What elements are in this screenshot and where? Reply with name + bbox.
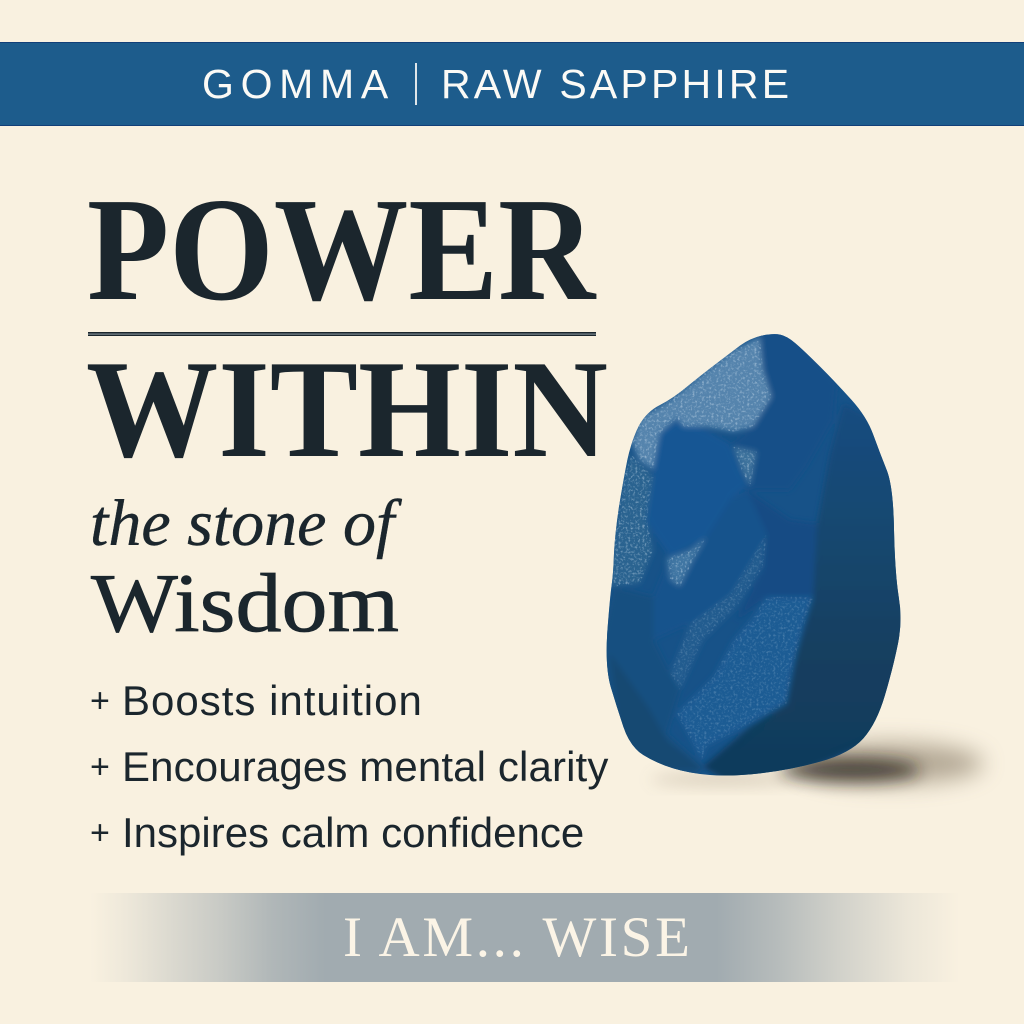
top banner	[0, 42, 1024, 126]
benefit 3: Inspires calm confidence	[122, 809, 584, 856]
stone shadow	[650, 743, 983, 784]
stone body	[606, 334, 900, 776]
benefit 2: Encourages mental clarity	[122, 743, 608, 790]
banner text: Gomma: GOMMA	[202, 61, 395, 107]
benefit 2: +	[90, 748, 110, 786]
benefit 1: +	[90, 682, 110, 720]
title: Within: WITHIN	[86, 332, 608, 487]
benefit 3: +	[90, 814, 110, 852]
surface grain on light facets	[614, 340, 771, 586]
affirmation band	[90, 893, 960, 982]
benefits list	[90, 677, 608, 856]
illustration: raw sapphire stone	[606, 334, 990, 798]
benefit 1: Boosts intuition	[122, 677, 423, 724]
banner divider	[415, 63, 417, 105]
subtitle: the stone of: the stone of	[90, 487, 394, 560]
banner text: Raw Sapphire: RAW SAPPHIRE	[441, 61, 792, 107]
subtitle: Wisdom: Wisdom	[91, 557, 399, 650]
affirmation text: I AM... WISE	[343, 906, 693, 969]
title rule	[88, 332, 596, 336]
title: Power: POWER	[87, 168, 595, 332]
